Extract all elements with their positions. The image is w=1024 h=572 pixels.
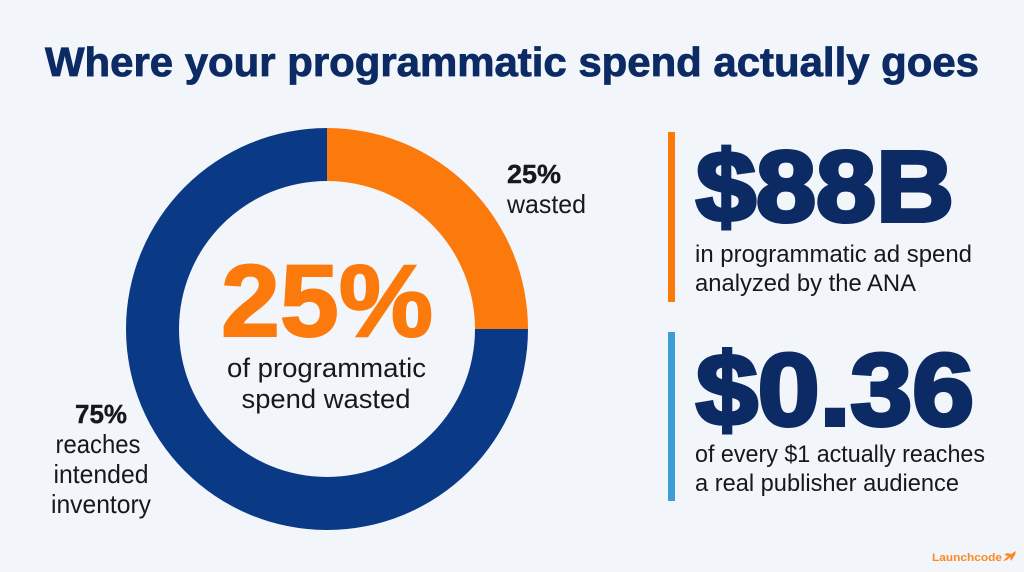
label: 75% reaches intended inventory: inventory: [51, 489, 151, 519]
label: 75% reaches intended inventory: intended: [54, 459, 148, 489]
donut chart: [126, 128, 528, 530]
donut segment: 75% reaches intended inventory: [126, 128, 528, 530]
logo wordmark: Launchcode: [932, 552, 1002, 564]
stat value: $0.36: [696, 333, 974, 447]
stat description: of every $1 actually reaches: [695, 441, 985, 468]
label: 25% wasted: [506, 159, 586, 219]
label: 25% wasted: 25%: [507, 159, 561, 189]
donut centre: big percentage: 25%: [221, 244, 433, 358]
label: 75% reaches intended inventory: 75%: [75, 399, 127, 429]
donut centre: caption: spend wasted: [242, 384, 410, 414]
stat description: a real publisher audience: [695, 470, 959, 497]
label: 25% wasted: wasted: [506, 189, 586, 219]
stat description: analyzed by the ANA: [695, 270, 916, 297]
donut centre: caption: [227, 353, 426, 414]
stat value: $88B: [696, 131, 954, 243]
stat: $88B: [668, 131, 972, 302]
icon: rocket: [1003, 551, 1016, 561]
stat description: [695, 241, 972, 297]
donut centre: caption: of programmatic: [227, 353, 426, 383]
label: 75% reaches intended inventory: reaches: [56, 429, 140, 459]
accent bar: blue: [668, 332, 675, 501]
stat: $0.36: [668, 332, 985, 501]
accent bar: orange: [668, 132, 675, 302]
logo: Launchcode: [932, 551, 1016, 564]
label: 75% reaches intended inventory: [51, 399, 151, 519]
donut segment: 25% wasted: [327, 128, 528, 329]
stat description: [695, 441, 985, 497]
stat description: in programmatic ad spend: [695, 241, 972, 268]
title: Where your programmatic spend actually goes: [45, 39, 979, 85]
